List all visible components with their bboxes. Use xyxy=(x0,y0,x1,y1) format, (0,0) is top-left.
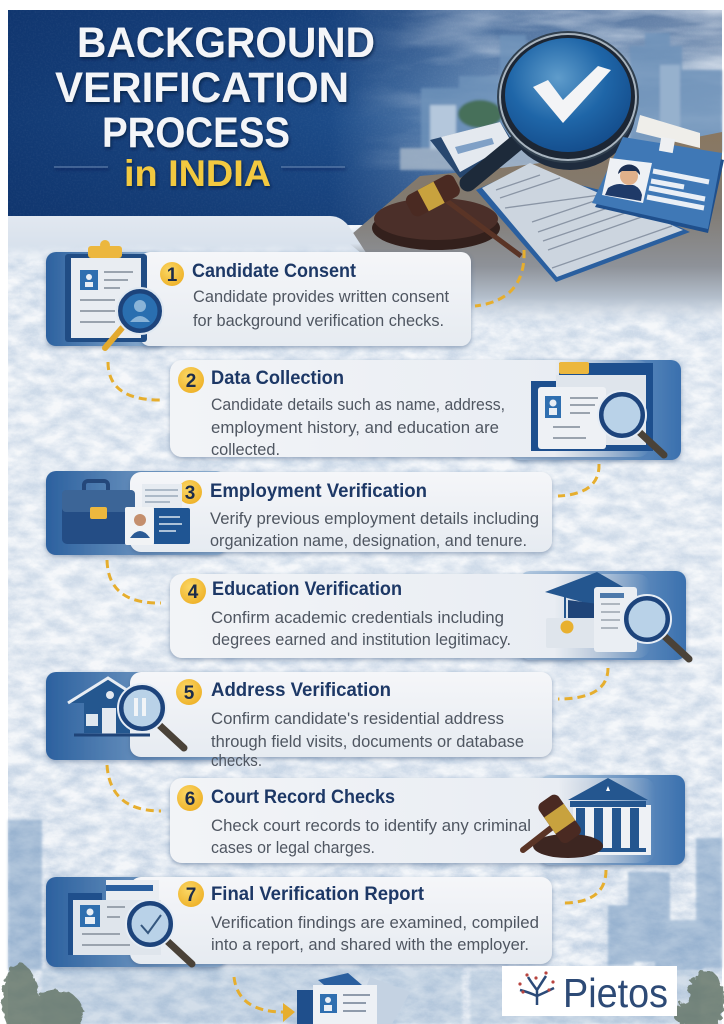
body: cases or legal charges. xyxy=(211,839,375,857)
title: BACKGROUND xyxy=(77,19,375,67)
title xyxy=(55,19,375,157)
body: employment history, and education are xyxy=(211,419,499,437)
body: into a report, and shared with the employer. xyxy=(211,936,529,954)
body: Candidate details such as name, address, xyxy=(211,396,505,414)
step number 4 xyxy=(180,578,206,604)
step number 7: 7 xyxy=(186,885,196,906)
icon: final report documents xyxy=(297,973,410,1024)
body: Verification findings are examined, compiled xyxy=(211,914,539,932)
step number 2 xyxy=(178,367,204,393)
body xyxy=(210,510,539,550)
icon: cap, certificate and magnifier xyxy=(545,572,689,659)
body xyxy=(193,288,449,330)
step number 1 xyxy=(160,262,184,286)
header banner xyxy=(8,10,722,225)
step number 3 xyxy=(178,480,202,504)
body xyxy=(211,914,539,954)
connectors: dashed paths xyxy=(107,250,608,1012)
heading: Employment Verification xyxy=(210,480,427,502)
body xyxy=(211,609,511,649)
body: degrees earned and institution legitimacy. xyxy=(212,631,511,649)
header skyline xyxy=(400,33,722,170)
icon: clipboard with magnifier xyxy=(65,240,163,348)
magnifying glass with check xyxy=(497,31,639,170)
form paper xyxy=(482,163,683,277)
step number 3: 3 xyxy=(185,483,195,504)
step 7: final verification report xyxy=(46,877,552,967)
logo: Pietos xyxy=(502,966,677,1016)
body: through field visits, documents or database xyxy=(211,733,524,751)
body: collected. xyxy=(211,441,280,459)
step number 5 xyxy=(176,679,202,705)
body: checks. xyxy=(211,752,262,770)
hero illustration: documents, gavel, magnifier, ID card xyxy=(372,31,724,282)
wordmark: Pietos xyxy=(563,970,668,1016)
body: Candidate provides written consent xyxy=(193,288,449,306)
title: PROCESS xyxy=(102,109,290,157)
step 1: candidate consent xyxy=(46,240,471,348)
arrow head xyxy=(283,1003,295,1022)
body: Confirm candidate's residential address xyxy=(211,710,504,728)
step 6: court record checks xyxy=(170,775,685,865)
body: Verify previous employment details including xyxy=(210,510,539,528)
ID card xyxy=(592,137,724,233)
subtitle: in India: in INDIA xyxy=(124,153,271,194)
step number 1: 1 xyxy=(167,265,178,286)
icon: briefcase and ID xyxy=(62,481,190,545)
step number 6: 6 xyxy=(185,789,195,810)
body: Check court records to identify any criminal xyxy=(211,817,531,835)
step 3: employment verification xyxy=(46,471,552,555)
step number 4: 4 xyxy=(188,582,199,603)
step 4: education verification xyxy=(170,571,689,660)
gavel xyxy=(372,172,521,256)
step number 6 xyxy=(177,785,203,811)
icon: report with check magnifier xyxy=(68,880,192,964)
title: VERIFICATION xyxy=(55,64,349,112)
magnifier handle xyxy=(468,140,520,183)
heading: Candidate Consent xyxy=(192,260,356,282)
step 2: data collection xyxy=(170,360,681,460)
body xyxy=(211,396,505,459)
step number 7 xyxy=(178,881,204,907)
icon: courthouse and gavel xyxy=(523,778,651,858)
body: organization name, designation, and tenure. xyxy=(210,532,527,550)
icon: documents and magnifier xyxy=(531,362,664,455)
folder under form xyxy=(476,170,690,282)
heading: Final Verification Report xyxy=(211,883,424,905)
body: Confirm academic credentials including xyxy=(211,609,504,627)
back document xyxy=(430,122,515,178)
heading: Address Verification xyxy=(211,679,391,701)
step 5: address verification xyxy=(46,672,552,770)
icon: house with magnifier xyxy=(68,678,184,748)
white papers behind ID xyxy=(636,115,700,148)
ground under header scene xyxy=(345,132,722,325)
body xyxy=(211,817,531,857)
heading: Data Collection xyxy=(211,367,344,389)
icon: tree xyxy=(518,971,555,1005)
step number 2: 2 xyxy=(186,371,196,392)
step number 5: 5 xyxy=(184,683,195,704)
body xyxy=(211,710,524,770)
panel: upper white band below title xyxy=(8,216,372,262)
body: for background verification checks. xyxy=(193,312,444,330)
heading: Court Record Checks xyxy=(211,786,395,808)
heading: Education Verification xyxy=(212,578,402,600)
background skyline and trees at bottom xyxy=(2,820,724,1024)
